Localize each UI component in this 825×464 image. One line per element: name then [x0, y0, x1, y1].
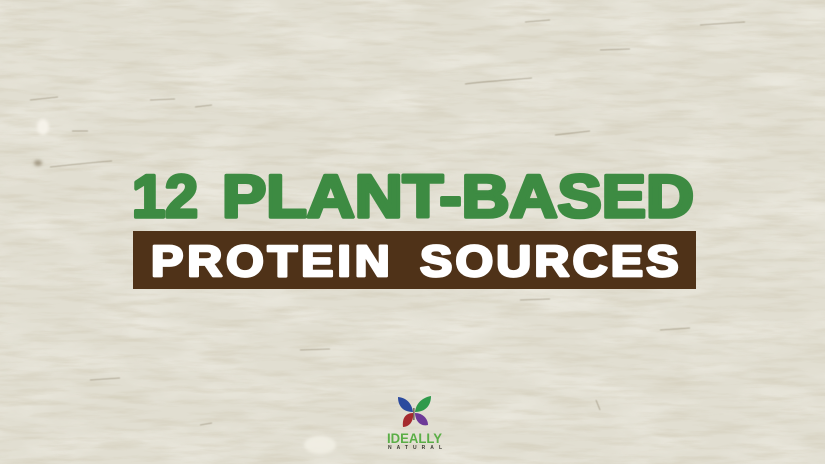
icon: butterfly leaves	[398, 396, 431, 427]
wordmark: NATURAL: NATURAL	[388, 445, 442, 451]
title: 12 Plant-Based: 12	[132, 163, 198, 230]
subtitle banner: SOURCES	[420, 236, 679, 286]
subtitle banner: PROTEIN	[151, 236, 390, 286]
title: 12 Plant-Based: PLANT-BASED	[222, 163, 694, 230]
wordmark: IDEALLY: IDEALLY	[387, 431, 442, 446]
logo: Ideally Natural	[387, 396, 442, 451]
subtitle banner	[133, 231, 696, 289]
